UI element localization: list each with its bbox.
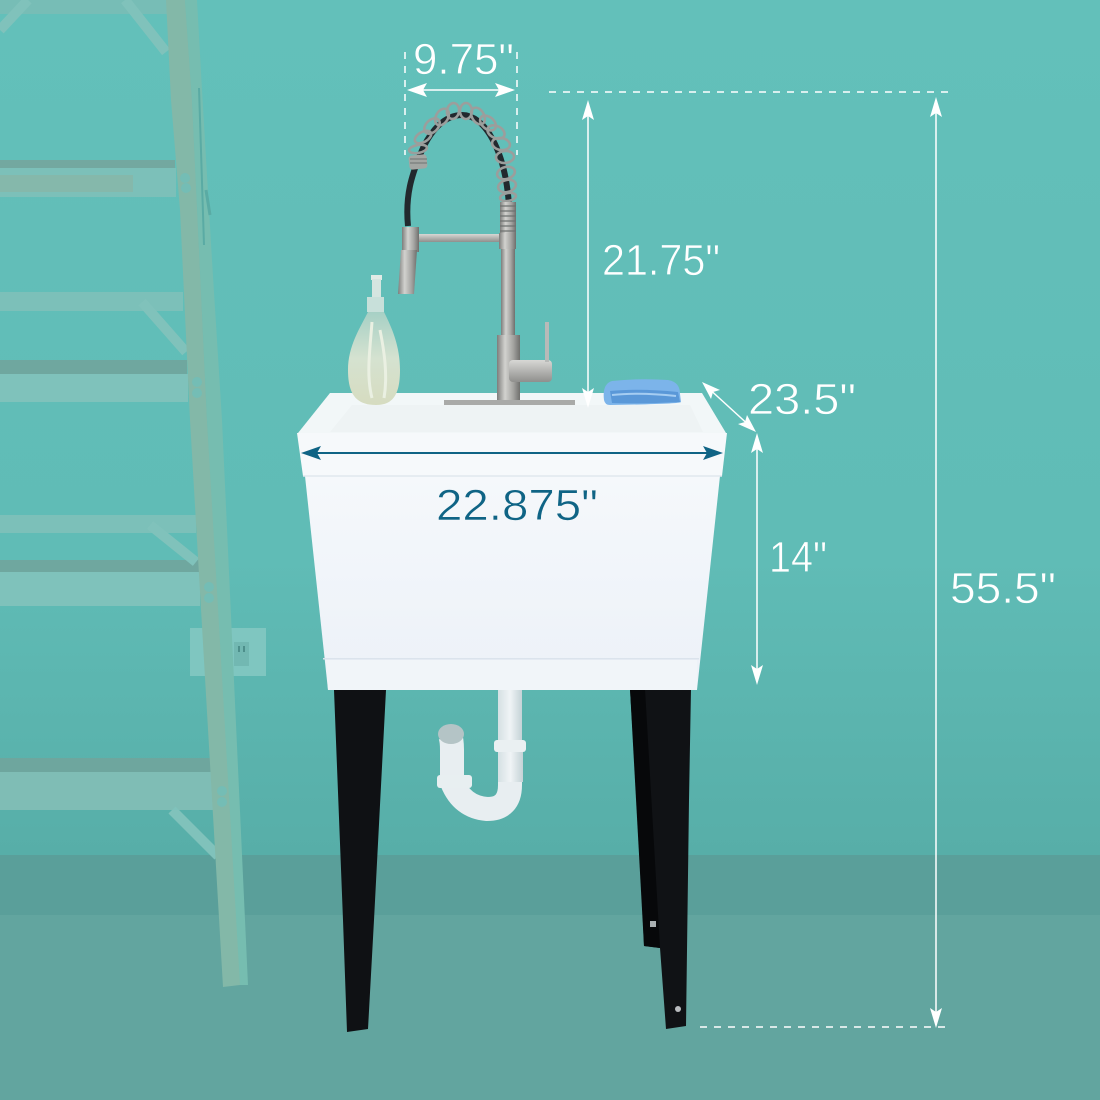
dimension: overall height 55.5 inches: 55.5" (950, 564, 1056, 613)
ladder: rivets (180, 173, 227, 807)
wall outlet (190, 628, 266, 676)
faucet: spray head (398, 227, 419, 294)
dimension: depth 23.5 inches (702, 375, 856, 432)
sink basin (297, 393, 727, 690)
dimension: basin height 14 inches (751, 433, 827, 685)
sink tub body (305, 476, 720, 690)
background: floor (0, 915, 1100, 1100)
dimension: faucet height 21.75 inches: 21.75" (602, 236, 720, 285)
faucet: deck plate (444, 400, 575, 405)
dimension: width 22.875 inches: 22.875" (436, 481, 598, 530)
faucet: hose (407, 115, 509, 226)
ladder: braces (0, 0, 218, 856)
sink deck back (298, 393, 726, 433)
faucet: spring collars (408, 154, 516, 234)
dimension: faucet reach 9.75 inches: 9.75" (413, 35, 514, 84)
sink legs (334, 688, 691, 1032)
faucet: main post (497, 233, 552, 401)
dimension: width 22.875 inches (301, 446, 723, 530)
P-trap drain pipe (437, 690, 526, 809)
dimension: faucet reach 9.75 inches (405, 35, 517, 155)
dimension: basin height 14 inches: 14" (769, 533, 827, 582)
dimension: overall height 55.5 inches (549, 92, 1056, 1028)
folded blue cloth (604, 379, 681, 405)
background: baseboard (0, 855, 1100, 917)
right leg (630, 688, 691, 1029)
faucet (398, 102, 575, 405)
sink front rim (297, 433, 727, 476)
ladder: steps (0, 0, 215, 810)
ladder: side rail (166, 0, 248, 987)
dimension: faucet height 21.75 inches (582, 100, 720, 408)
soap bottle (348, 275, 400, 405)
background: teal wall (0, 0, 1100, 856)
left leg (334, 690, 386, 1032)
ladder (0, 0, 248, 987)
faucet: crossbar (418, 234, 502, 242)
faucet: spring coil (408, 102, 517, 202)
dimension: depth 23.5 inches: 23.5" (748, 375, 856, 424)
